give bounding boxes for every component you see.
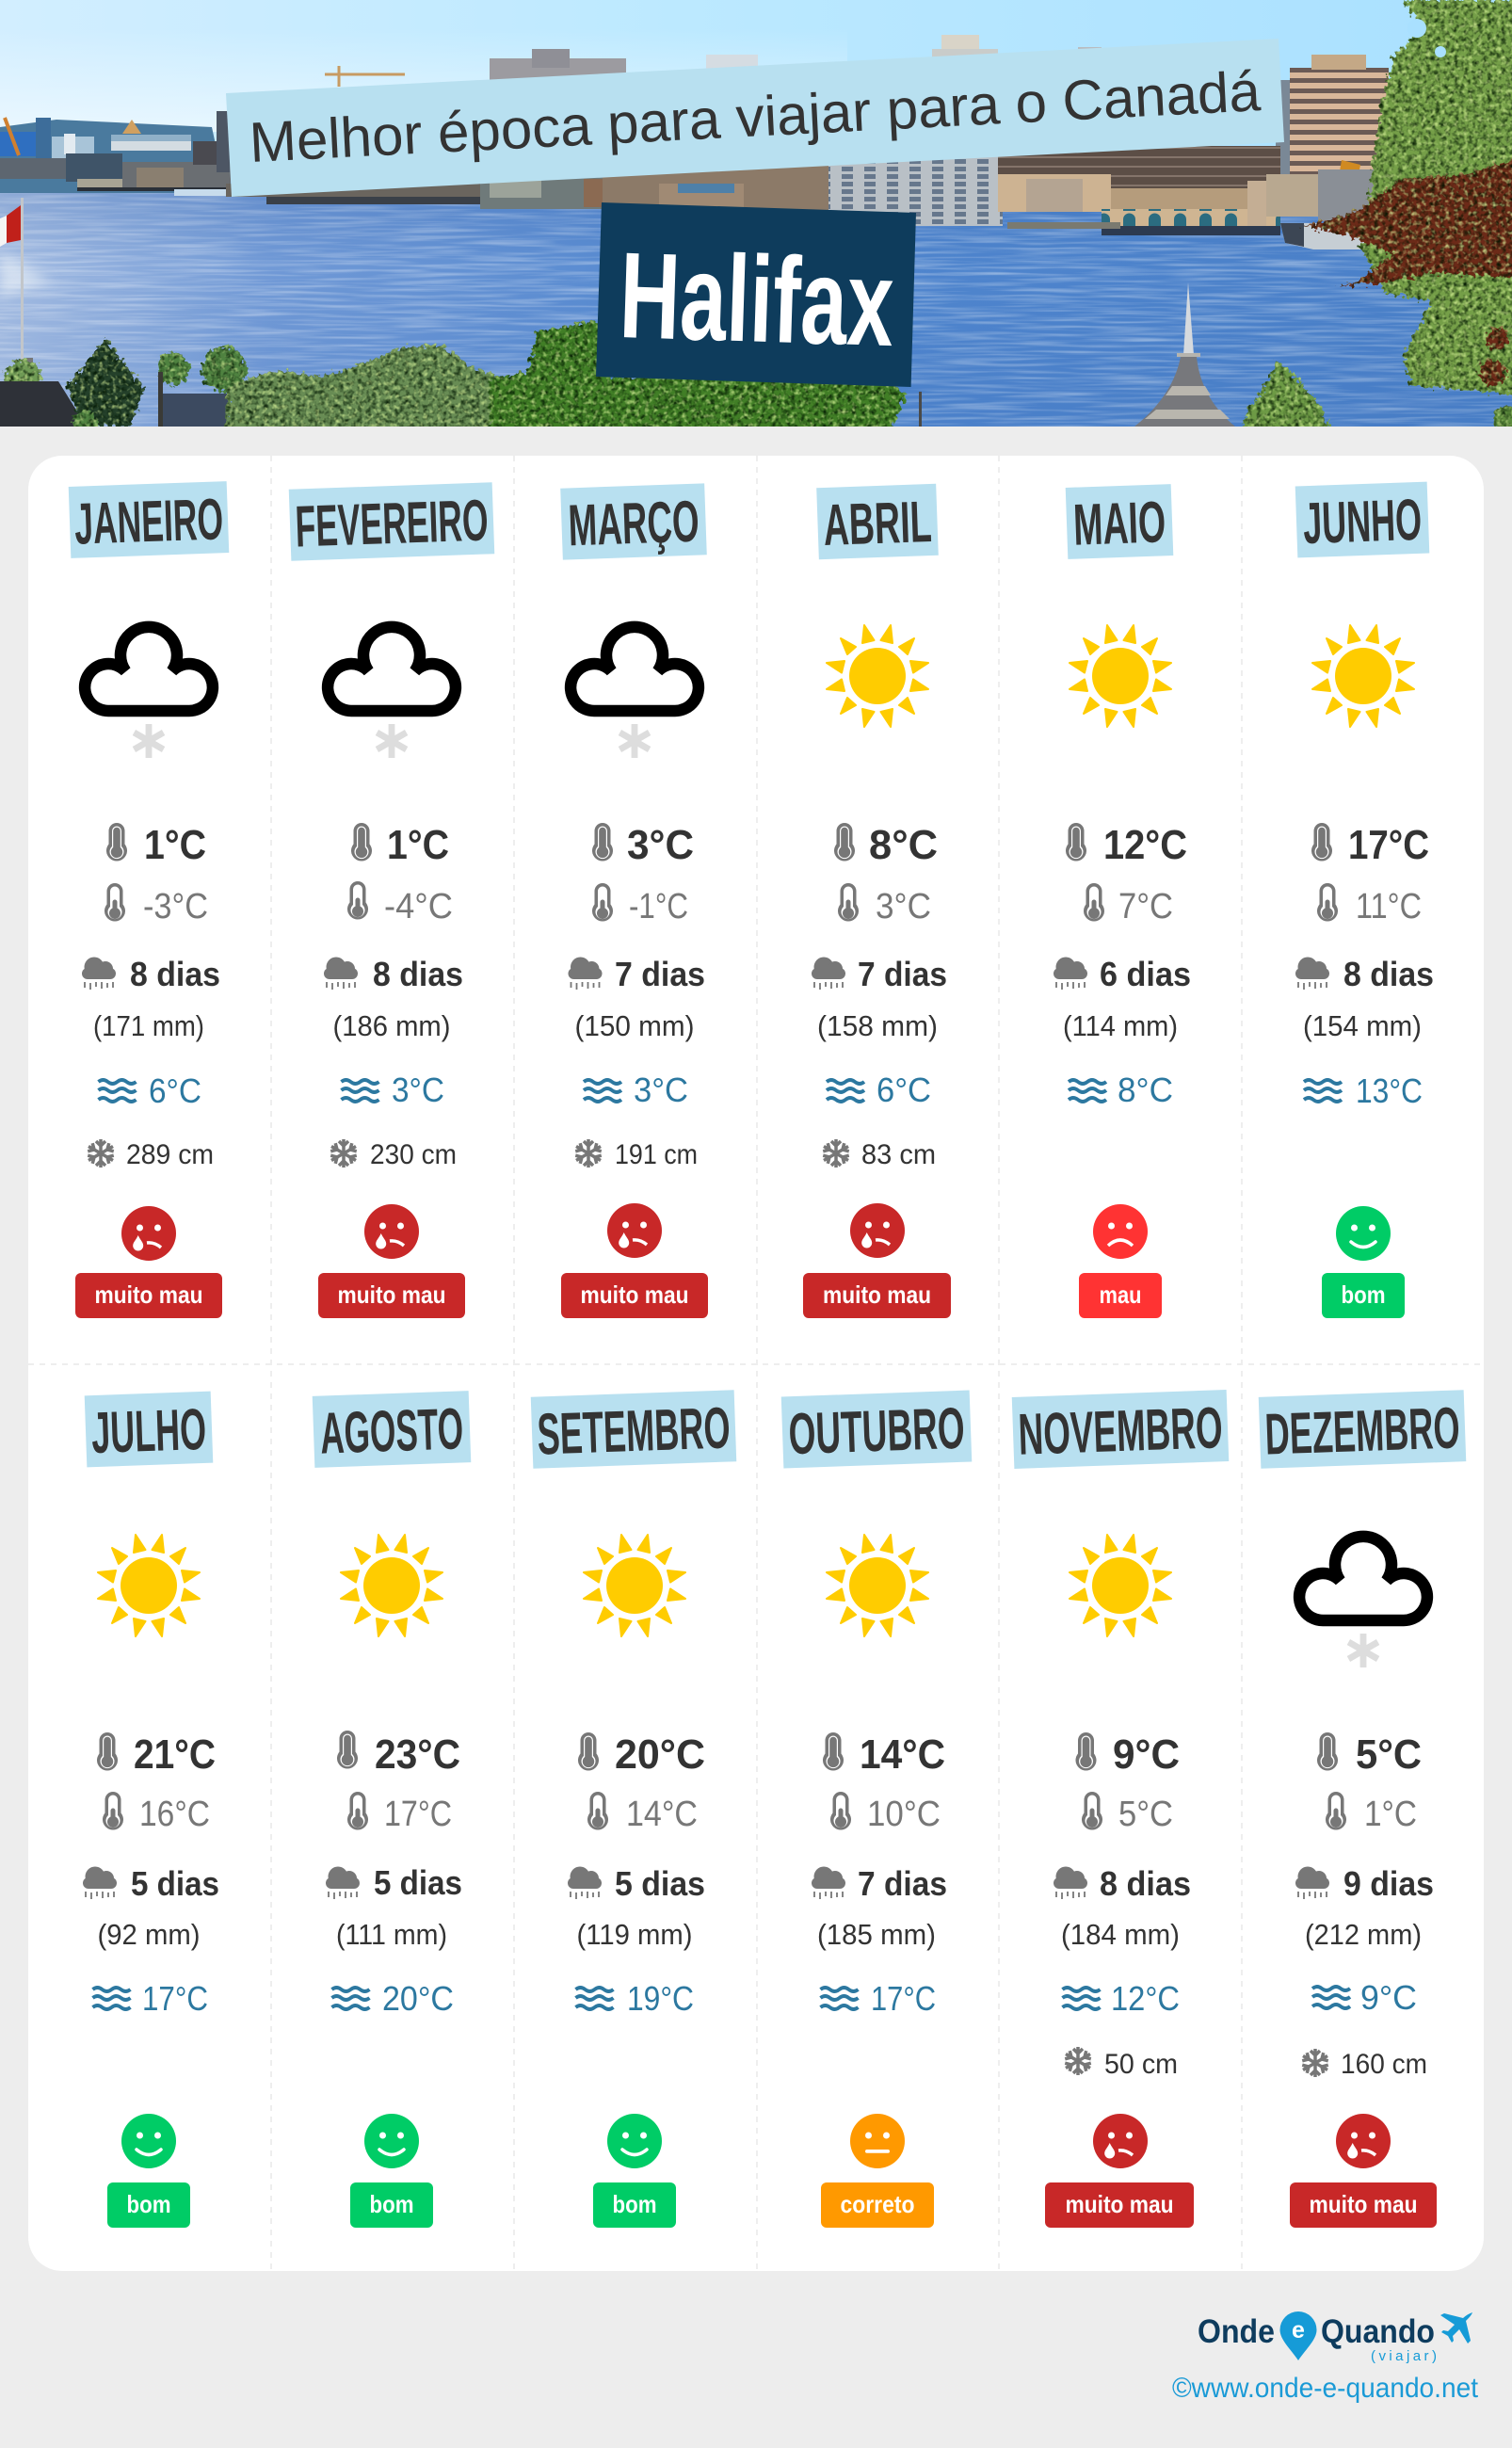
rain days: 9 dias bbox=[1343, 1864, 1434, 1903]
rating label: bom bbox=[612, 2190, 657, 2218]
low temperature: 1°C bbox=[1364, 1795, 1417, 1834]
icon: sun bbox=[1312, 625, 1414, 727]
low temperature bbox=[347, 881, 453, 926]
rating label bbox=[561, 1273, 708, 1318]
icon: sun bbox=[98, 1535, 200, 1636]
rain days: 8 dias bbox=[130, 955, 220, 993]
rating label bbox=[821, 2182, 934, 2228]
sea temperature bbox=[1304, 1071, 1423, 1110]
rain days: 7 dias bbox=[858, 1864, 947, 1903]
header photo: Halifax harbour bbox=[0, 0, 1512, 437]
sea temperature: 8°C bbox=[1118, 1071, 1173, 1109]
rain days: 8 dias bbox=[1343, 955, 1434, 993]
rain days bbox=[83, 1864, 219, 1903]
high temperature bbox=[97, 1731, 216, 1778]
rainfall: (150 mm) bbox=[574, 1009, 695, 1042]
high temperature bbox=[1066, 822, 1187, 868]
snowfall bbox=[1301, 2049, 1427, 2080]
low temperature bbox=[1082, 1792, 1173, 1834]
sea temperature bbox=[821, 1979, 936, 2018]
rain days bbox=[82, 955, 220, 993]
panel: janeiro bbox=[69, 481, 229, 1318]
month heading: MARÇO bbox=[567, 490, 700, 558]
rating face bbox=[121, 1206, 176, 1261]
icon: sun bbox=[584, 1535, 685, 1636]
rainfall: (119 mm) bbox=[576, 1918, 693, 1951]
logo: Onde e Quando: Quando bbox=[1321, 2313, 1435, 2350]
panel: novembro bbox=[1012, 1390, 1229, 2228]
low temperature bbox=[347, 1792, 452, 1834]
rating face bbox=[850, 1203, 905, 1258]
low temperature: -4°C bbox=[384, 887, 453, 926]
sea temperature: 17°C bbox=[142, 1979, 208, 2018]
month heading bbox=[1295, 482, 1429, 557]
rain days: 5 dias bbox=[615, 1864, 705, 1903]
website credit: ©www.onde-e-quando.net bbox=[1172, 2373, 1479, 2404]
month heading: FEVEREIRO bbox=[294, 488, 490, 560]
flag pole and flag bbox=[0, 198, 24, 367]
high temperature: 3°C bbox=[627, 822, 694, 868]
high temperature bbox=[351, 822, 449, 868]
rain days: 8 dias bbox=[373, 955, 463, 993]
icon: snow cloud bbox=[328, 627, 456, 758]
high temperature: 12°C bbox=[1103, 822, 1187, 868]
sea temperature bbox=[1069, 1071, 1173, 1109]
rating face bbox=[1336, 1206, 1391, 1261]
rain days bbox=[326, 1863, 462, 1902]
rain days bbox=[1054, 955, 1191, 993]
low temperature: 7°C bbox=[1118, 887, 1173, 926]
rainfall: (212 mm) bbox=[1305, 1918, 1422, 1951]
icon: sun bbox=[1070, 1535, 1171, 1636]
low temperature bbox=[1317, 883, 1422, 926]
icon: sun bbox=[827, 625, 928, 727]
sea temperature bbox=[341, 1071, 444, 1109]
icon: sun bbox=[341, 1535, 442, 1636]
rain days bbox=[812, 955, 947, 993]
sea temperature bbox=[827, 1071, 931, 1109]
sea temperature bbox=[92, 1979, 208, 2018]
month heading: SETEMBRO bbox=[536, 1395, 732, 1468]
logo: Onde e Quando: e bbox=[1292, 2317, 1305, 2343]
month heading: OUTUBRO bbox=[787, 1396, 966, 1467]
month heading bbox=[289, 482, 494, 561]
sea temperature: 20°C bbox=[382, 1979, 454, 2018]
sea temperature: 6°C bbox=[149, 1071, 201, 1110]
rain days bbox=[569, 955, 705, 993]
rain days bbox=[568, 1864, 705, 1903]
title band bbox=[226, 39, 1284, 197]
sea temperature: 9°C bbox=[1360, 1978, 1417, 2017]
rainfall: (158 mm) bbox=[817, 1009, 938, 1042]
low temperature: 3°C bbox=[876, 887, 931, 926]
snowfall: 191 cm bbox=[615, 1139, 698, 1170]
snowfall: 160 cm bbox=[1341, 2049, 1427, 2080]
high temperature bbox=[106, 822, 206, 868]
rating face bbox=[1093, 1204, 1148, 1259]
high temperature bbox=[1317, 1731, 1422, 1778]
rating label: muito mau bbox=[823, 1280, 931, 1309]
month heading bbox=[560, 483, 707, 560]
rating label bbox=[107, 2182, 190, 2228]
rating label bbox=[1045, 2182, 1194, 2228]
icon: sun bbox=[1070, 625, 1171, 727]
sea temperature bbox=[1312, 1978, 1417, 2017]
rating label: bom bbox=[1341, 1280, 1386, 1309]
icon: snow cloud bbox=[85, 627, 213, 758]
sea temperature: 13°C bbox=[1356, 1071, 1423, 1110]
month heading: JUNHO bbox=[1302, 488, 1423, 556]
snowfall: 230 cm bbox=[370, 1139, 457, 1170]
rain days: 7 dias bbox=[615, 955, 705, 993]
sea temperature: 12°C bbox=[1111, 1979, 1180, 2018]
rainfall: (185 mm) bbox=[817, 1918, 936, 1951]
month heading bbox=[781, 1391, 972, 1468]
month heading: NOVEMBRO bbox=[1017, 1395, 1224, 1468]
rating label bbox=[593, 2182, 676, 2228]
snowfall bbox=[822, 1139, 936, 1170]
rain days: 8 dias bbox=[1100, 1864, 1191, 1903]
low temperature: 16°C bbox=[139, 1795, 210, 1834]
sea temperature bbox=[331, 1979, 454, 2018]
icon: sun bbox=[827, 1535, 928, 1636]
sea temperature bbox=[98, 1071, 201, 1110]
month heading bbox=[85, 1392, 213, 1467]
low temperature: 14°C bbox=[626, 1795, 698, 1834]
month heading bbox=[69, 481, 229, 558]
sea temperature: 3°C bbox=[634, 1071, 688, 1109]
low temperature bbox=[1326, 1792, 1417, 1834]
low temperature: -3°C bbox=[143, 887, 208, 926]
rain days bbox=[1295, 1864, 1434, 1903]
high temperature bbox=[592, 822, 694, 868]
low temperature bbox=[103, 1792, 210, 1834]
logo: Onde e Quando: (viajar) bbox=[1371, 2348, 1437, 2364]
snowfall bbox=[1064, 2047, 1178, 2080]
rating label: mau bbox=[1100, 1280, 1141, 1309]
high temperature bbox=[1311, 822, 1429, 868]
rating label: muito mau bbox=[1066, 2190, 1173, 2218]
high temperature bbox=[823, 1731, 945, 1778]
panel: maio bbox=[1054, 484, 1191, 1318]
rating label: muito mau bbox=[580, 1280, 689, 1309]
rating label: bom bbox=[369, 2190, 414, 2218]
panel: fevereiro bbox=[289, 482, 494, 1318]
rating face bbox=[850, 2114, 905, 2168]
rain days bbox=[812, 1864, 947, 1903]
high temperature: 8°C bbox=[869, 822, 938, 868]
panel: março bbox=[560, 483, 708, 1318]
high temperature: 9°C bbox=[1113, 1731, 1180, 1778]
church spire bbox=[1134, 282, 1235, 427]
rainfall: (186 mm) bbox=[333, 1009, 450, 1042]
month heading: JANEIRO bbox=[73, 487, 224, 557]
panel: outubro bbox=[781, 1391, 972, 2228]
icon: snow cloud bbox=[571, 627, 699, 758]
low temperature bbox=[838, 883, 931, 926]
low temperature: 10°C bbox=[867, 1795, 941, 1834]
month heading: JULHO bbox=[90, 1397, 207, 1466]
icon: snow cloud bbox=[1299, 1537, 1427, 1667]
rating label: muito mau bbox=[94, 1280, 203, 1309]
sea temperature: 17°C bbox=[871, 1979, 936, 2018]
panel: agosto bbox=[313, 1391, 471, 2228]
low temperature bbox=[1084, 883, 1173, 926]
low temperature: 11°C bbox=[1356, 887, 1422, 926]
city name: Halifax: Halifax bbox=[618, 226, 896, 372]
high temperature bbox=[337, 1731, 460, 1778]
rating face bbox=[607, 1203, 662, 1258]
month heading bbox=[1012, 1390, 1229, 1469]
rainfall: (92 mm) bbox=[98, 1918, 200, 1951]
high temperature bbox=[578, 1731, 705, 1778]
rain days: 7 dias bbox=[858, 955, 947, 993]
low temperature: 5°C bbox=[1118, 1795, 1173, 1834]
panel: months table bbox=[28, 456, 1484, 2271]
low temperature bbox=[587, 1792, 698, 1834]
rain days: 6 dias bbox=[1100, 955, 1191, 993]
month heading bbox=[1066, 484, 1173, 559]
rainfall: (111 mm) bbox=[336, 1918, 447, 1951]
panel: julho bbox=[83, 1392, 219, 2228]
rating label bbox=[1290, 2182, 1437, 2228]
low temperature: -1°C bbox=[629, 887, 688, 926]
high temperature: 1°C bbox=[387, 822, 449, 868]
panel: junho bbox=[1295, 482, 1434, 1318]
high temperature: 5°C bbox=[1356, 1731, 1422, 1778]
month heading: AGOSTO bbox=[319, 1396, 464, 1467]
sea temperature: 3°C bbox=[392, 1071, 444, 1109]
rating face bbox=[364, 2114, 419, 2168]
rating label: bom bbox=[126, 2190, 171, 2218]
month heading: ABRIL bbox=[822, 490, 933, 558]
rain days bbox=[1295, 955, 1434, 993]
panel: setembro bbox=[531, 1390, 736, 2228]
rating label: muito mau bbox=[1309, 2190, 1418, 2218]
snowfall bbox=[574, 1139, 698, 1170]
low temperature bbox=[592, 883, 688, 926]
high temperature bbox=[1075, 1731, 1180, 1778]
rating face bbox=[1336, 2114, 1391, 2168]
month heading bbox=[816, 484, 939, 559]
high temperature: 23°C bbox=[375, 1731, 460, 1778]
sea temperature: 19°C bbox=[627, 1979, 694, 2018]
rating label bbox=[1322, 1273, 1405, 1318]
high temperature: 1°C bbox=[144, 822, 206, 868]
rating label: muito mau bbox=[337, 1280, 446, 1309]
rain days bbox=[1054, 1864, 1191, 1903]
low temperature bbox=[830, 1792, 941, 1834]
month heading: MAIO bbox=[1072, 490, 1166, 558]
title band: Melhor época para viajar para o Canadá bbox=[248, 59, 1263, 174]
high temperature: 17°C bbox=[1348, 822, 1429, 868]
high temperature: 21°C bbox=[134, 1731, 216, 1778]
rating label bbox=[318, 1273, 465, 1318]
logo: Onde e Quando bbox=[1198, 2311, 1472, 2364]
high temperature: 20°C bbox=[615, 1731, 705, 1778]
rain days: 5 dias bbox=[374, 1863, 462, 1902]
snowfall: 289 cm bbox=[126, 1139, 214, 1170]
rating face bbox=[607, 2114, 662, 2168]
rating face bbox=[1093, 2114, 1148, 2168]
snowfall: 83 cm bbox=[861, 1139, 936, 1170]
rain days bbox=[324, 955, 463, 993]
rating label bbox=[350, 2182, 433, 2228]
rainfall: (171 mm) bbox=[93, 1009, 204, 1042]
snowfall bbox=[87, 1139, 214, 1170]
snowfall: 50 cm bbox=[1104, 2049, 1178, 2080]
high temperature: 14°C bbox=[860, 1731, 945, 1778]
low temperature bbox=[105, 883, 208, 926]
rainfall: (184 mm) bbox=[1061, 1918, 1180, 1951]
sea temperature: 6°C bbox=[877, 1071, 931, 1109]
low temperature: 17°C bbox=[384, 1795, 452, 1834]
snowfall bbox=[330, 1139, 457, 1170]
sea temperature bbox=[584, 1071, 688, 1109]
month heading bbox=[531, 1390, 736, 1469]
sea temperature bbox=[1062, 1979, 1180, 2018]
month heading bbox=[313, 1391, 471, 1468]
panel: dezembro bbox=[1259, 1390, 1466, 2228]
rating label bbox=[803, 1273, 951, 1318]
sea temperature bbox=[576, 1979, 694, 2018]
panel: abril bbox=[803, 484, 951, 1318]
rating label: correto bbox=[840, 2190, 915, 2218]
rainfall: (154 mm) bbox=[1303, 1009, 1422, 1042]
rain days: 5 dias bbox=[131, 1864, 219, 1903]
logo: Onde e Quando: Onde bbox=[1198, 2313, 1275, 2350]
rating label bbox=[1079, 1273, 1162, 1318]
high temperature bbox=[834, 822, 938, 868]
rating face bbox=[121, 2114, 176, 2168]
rating label bbox=[75, 1273, 222, 1318]
city name: Halifax bbox=[596, 202, 916, 387]
rating face bbox=[364, 1204, 419, 1259]
rainfall: (114 mm) bbox=[1063, 1009, 1178, 1042]
